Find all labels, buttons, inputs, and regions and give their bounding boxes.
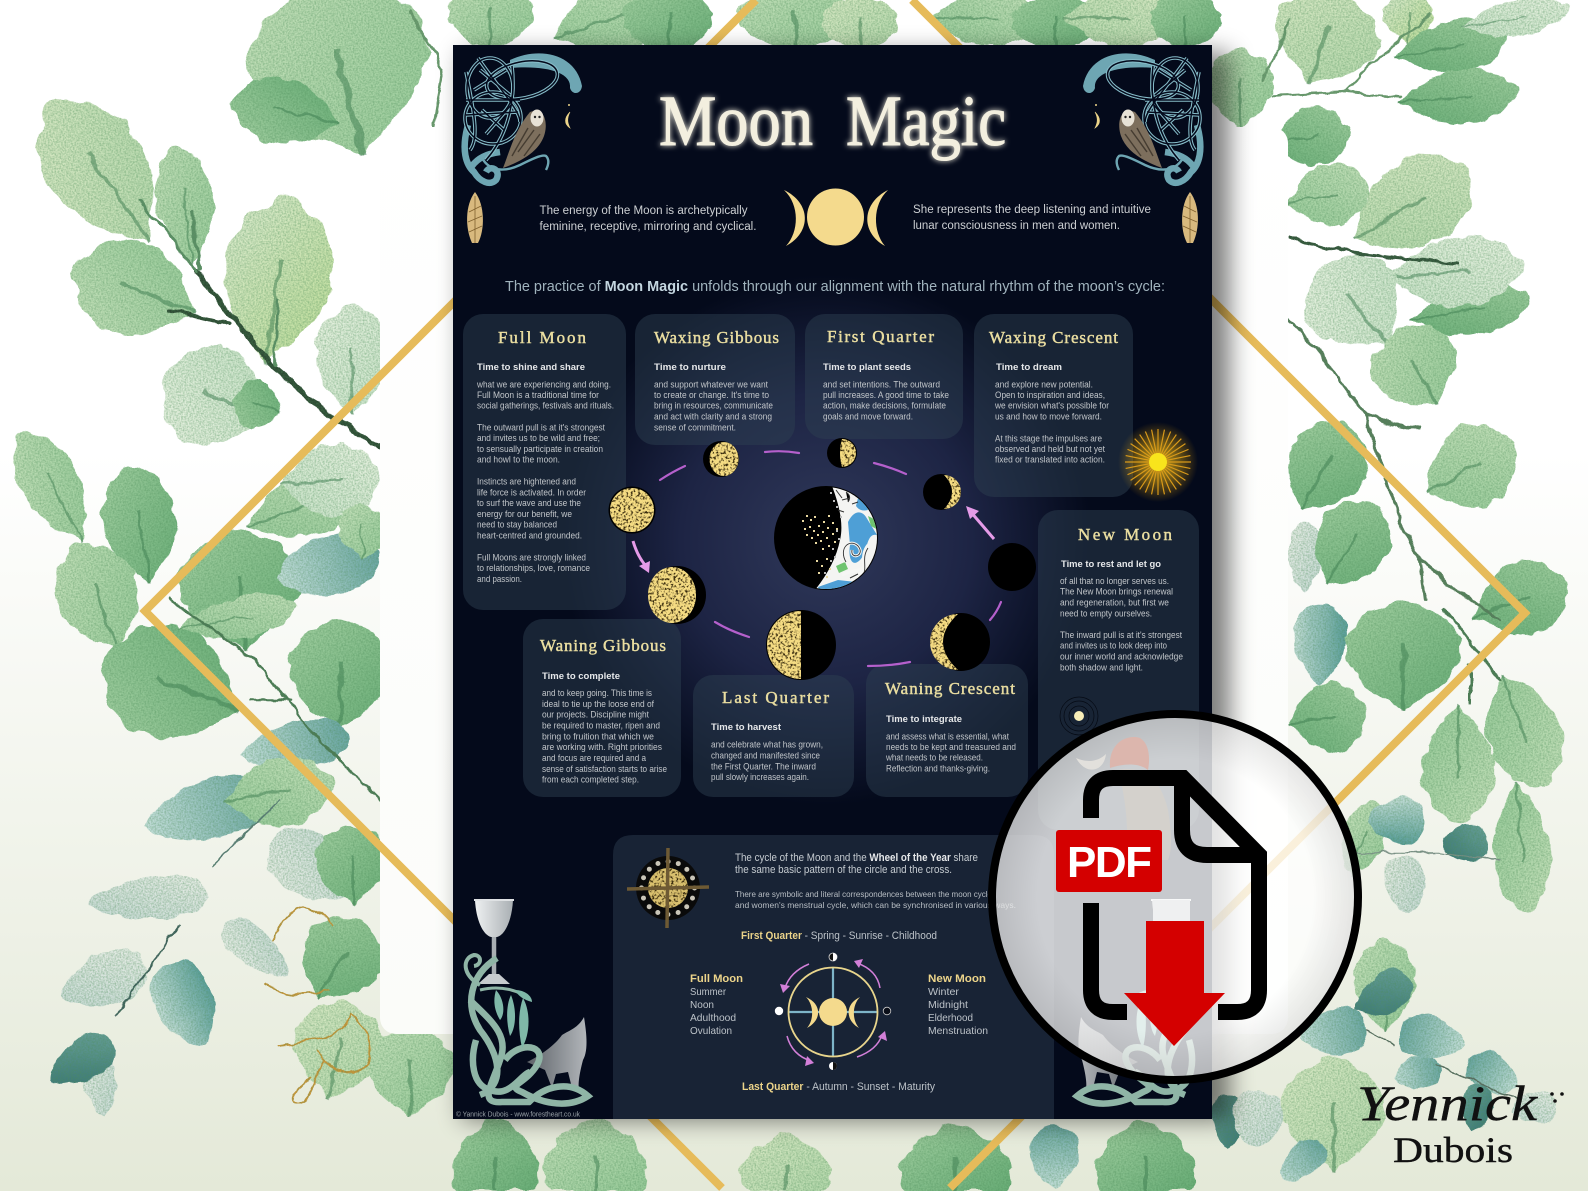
body text: Waning Crescent: and assess what is essential, what	[886, 731, 1009, 741]
body text: Full Moon: energy for our benefit, we	[477, 509, 572, 519]
body text: Full Moon: to sensually participate in creation	[477, 444, 603, 454]
body text: Full Moon: and invites us to be wild and free;	[477, 433, 600, 443]
body text: Waning Gibbous: sense of satisfaction starts to arise	[542, 764, 667, 774]
arrow: download	[1124, 921, 1225, 1046]
body text: New Moon: and invites us to look deep into	[1060, 641, 1167, 651]
body text: Waning Gibbous: bring to fruition that which we	[542, 731, 654, 741]
central glow	[560, 275, 1090, 805]
poster shadow	[462, 52, 1230, 1120]
body text: New Moon: need to empty ourselves.	[1060, 608, 1152, 618]
body text: First Quarter	[823, 379, 949, 422]
new moon correspondences: Elderhood	[928, 1012, 973, 1024]
new moon correspondences: Winter	[928, 986, 960, 998]
body text: Waxing Gibbous: to create or change. It's time to	[654, 390, 769, 400]
moon orbit arcs	[660, 451, 1001, 666]
body text: Waning Gibbous: our projects. Discipline might	[542, 710, 650, 720]
body text: Waxing Gibbous	[654, 379, 773, 432]
card headings: Full Moon	[498, 328, 586, 347]
card subheadings	[477, 362, 1161, 733]
signature	[1357, 1075, 1564, 1170]
body text: Waxing Gibbous: and support whatever we want	[654, 379, 769, 389]
intro text left	[540, 205, 756, 233]
body text: Waning Gibbous: and focus are required and a	[542, 753, 646, 763]
title	[659, 81, 1006, 161]
card subheadings: Time to plant seeds	[823, 362, 911, 373]
correspondences note: There are symbolic and literal correspondences between the moon cycle	[735, 889, 992, 899]
intro text left: The energy of the Moon is archetypically	[540, 205, 748, 217]
moon: waning gibbous	[648, 566, 706, 624]
white card behind poster	[380, 127, 1288, 1034]
body text: New Moon: The inward pull is at it's strongest	[1060, 630, 1183, 640]
card headings: First Quarter	[827, 327, 934, 346]
body text: Waning Crescent: what needs to be released.	[885, 753, 983, 763]
correspondences note	[735, 889, 1016, 910]
body text: Waning Gibbous	[542, 688, 667, 785]
pdf label: PDF	[1067, 838, 1152, 887]
full moon correspondences: Summer	[690, 986, 726, 998]
card headings: Waxing Crescent	[989, 328, 1118, 347]
body text: Waxing Crescent: we envision what's possible for	[994, 401, 1109, 411]
body text: Waxing Gibbous: bring in resources, communicate	[654, 401, 773, 411]
card subheadings: Time to nurture	[654, 362, 726, 373]
body text: Last Quarter: and celebrate what has grown,	[711, 740, 823, 750]
body text: First Quarter: goals and move forward.	[823, 412, 913, 422]
body text: New Moon: and regeneration, but first we	[1060, 597, 1169, 607]
title: Magic	[846, 81, 1006, 161]
card subheadings: Time to complete	[542, 671, 620, 682]
wheel text: The cycle of the Moon and the Wheel of the Year share	[735, 852, 978, 864]
card headings: Waning Gibbous	[540, 636, 666, 655]
body text: Full Moon: heart-centred and grounded.	[477, 531, 582, 541]
icon: triple moon	[784, 188, 888, 246]
body text: First Quarter: pull increases. A good time to take	[823, 390, 949, 400]
new moon correspondences	[928, 973, 988, 1037]
body text: Full Moon: and howl to the moon.	[477, 455, 560, 465]
faint figure behind lens	[1076, 737, 1190, 921]
full moon correspondences: Noon	[690, 999, 714, 1011]
intro text right: lunar consciousness in men and women.	[913, 220, 1120, 232]
card headings: Waxing Gibbous	[654, 328, 779, 347]
body text: First Quarter: and set intentions. The outward	[823, 379, 940, 389]
card subheadings: Time to shine and share	[477, 362, 585, 373]
body text: New Moon: both shadow and light.	[1060, 662, 1143, 672]
first quarter label: First Quarter - Spring - Sunrise - Childhood	[741, 930, 937, 942]
body text: Waning Gibbous: from each completed step.	[542, 775, 639, 785]
full moon correspondences	[690, 973, 743, 1037]
moon: full	[608, 486, 656, 534]
intro text right: She represents the deep listening and intuitive	[913, 204, 1151, 216]
card headings	[498, 327, 1172, 707]
full moon correspondences: Adulthood	[690, 1012, 736, 1024]
card headings: Waning Crescent	[885, 679, 1015, 698]
body text: Waning Gibbous: and to keep going. This time is	[542, 688, 653, 698]
panel: wheel of the year	[613, 835, 1054, 1119]
poster: Moon Magic	[453, 45, 1212, 1119]
copyright: © Yannick Dubois - www.forestheart.co.uk	[456, 1110, 580, 1118]
body text: Waning Gibbous: ideal to tie up the loose end of	[542, 699, 655, 709]
icon: sun	[1118, 422, 1198, 502]
body text: New Moon: The New Moon brings renewal	[1060, 587, 1173, 597]
body text: Waxing Crescent: observed and held but not yet	[995, 444, 1106, 454]
body text: Full Moon: Full Moon is a traditional time for	[477, 390, 599, 400]
card subheadings: Time to harvest	[711, 722, 782, 733]
icon: wheel of the year cross	[627, 848, 709, 928]
title: Moon	[659, 81, 813, 161]
card headings: New Moon	[1078, 525, 1172, 544]
moon cycle cards	[463, 314, 1199, 830]
last quarter label: Last Quarter - Autumn - Sunset - Maturity	[742, 1081, 935, 1093]
body text: Waning Crescent: Reflection and thanks-giving.	[886, 764, 990, 774]
body text: Full Moon: Full Moons are strongly linked	[477, 552, 586, 562]
body text: Last Quarter	[711, 740, 823, 782]
body text: Last Quarter: pull slowly increases again.	[711, 772, 809, 782]
body text: New Moon	[1060, 576, 1183, 672]
body text: Waxing Crescent	[994, 379, 1109, 465]
signature: Yennick	[1357, 1075, 1538, 1131]
body text: Full Moon	[476, 379, 614, 584]
body text: Waxing Crescent: At this stage the impulses are	[995, 433, 1102, 443]
body text: New Moon: of all that no longer serves us.	[1060, 576, 1169, 586]
correspondences note: and women's menstrual cycle, which can be synchronised in various ways.	[735, 900, 1016, 910]
card subheadings: Time to integrate	[886, 714, 962, 725]
card headings: Last Quarter	[722, 688, 829, 707]
body text: Full Moon: need to stay balanced	[477, 520, 557, 530]
corner knot and owl: top right	[1083, 53, 1200, 243]
body text: Waning Gibbous: are working with. Right priorities	[542, 742, 663, 752]
body text: Waning Crescent: needs to be kept and treasured and	[886, 742, 1016, 752]
body text: Waxing Crescent: fixed or translated into action.	[995, 455, 1105, 465]
body text: Full Moon: social gatherings, festivals and rituals.	[477, 401, 614, 411]
body text: First Quarter: action, make decisions, formulate	[823, 401, 946, 411]
wheel text	[735, 852, 978, 876]
arrow: orbit left	[633, 541, 650, 573]
body text: New Moon: our inner world and acknowledge	[1060, 652, 1183, 662]
intro text left: feminine, receptive, mirroring and cyclical.	[540, 221, 756, 233]
new moon correspondences: New Moon	[928, 973, 986, 985]
full moon correspondences: Ovulation	[690, 1025, 732, 1037]
body text: Full Moon: Instincts are hightened and	[477, 476, 576, 486]
card subheadings: Time to dream	[996, 362, 1062, 373]
full moon correspondences: Full Moon	[690, 973, 743, 985]
wheel text: the same basic pattern of the circle and the cross.	[735, 864, 952, 876]
body text: Full Moon: to relationships, love, romance	[477, 563, 590, 573]
corner knot and owl: top left	[465, 53, 582, 243]
body text: Full Moon: and passion.	[477, 574, 522, 584]
body text: Full Moon: life force is activated. In order	[477, 487, 586, 497]
pdf label	[1056, 830, 1162, 892]
body text: Waxing Crescent: Open to inspiration and ideas,	[995, 390, 1105, 400]
pdf download badge	[992, 714, 1358, 1080]
new moon correspondences: Midnight	[928, 999, 968, 1011]
wheel diagram	[775, 953, 891, 1070]
chalice, vine and wolf: bottom right	[1077, 899, 1199, 1104]
intro text right	[913, 204, 1151, 232]
body text: Waxing Gibbous: sense of commitment.	[654, 422, 736, 432]
moon: first quarter	[827, 438, 857, 468]
body text: Last Quarter: changed and manifested since	[711, 750, 820, 760]
icon: pdf document	[1091, 778, 1259, 1012]
body text: Waxing Crescent: us and how to move forward.	[995, 411, 1102, 421]
chalice, vine and wolf: bottom left	[466, 899, 588, 1104]
moon: waxing gibbous	[703, 441, 739, 477]
body text: Full Moon: The outward pull is at it's strongest	[477, 422, 606, 432]
body text: Full Moon: to surf the wave and use the	[477, 498, 581, 508]
body text: Waxing Crescent: and explore new potential.	[995, 379, 1093, 389]
body text: Last Quarter: the First Quarter. The inward	[711, 761, 816, 771]
body text: Full Moon: what we are experiencing and doing.	[476, 379, 611, 389]
body text: Waning Crescent	[885, 731, 1016, 774]
new moon correspondences: Menstruation	[928, 1025, 988, 1037]
practice statement: The practice of Moon Magic unfolds through our alignment with the natural rhythm of the moon’s cycle:	[505, 279, 1165, 295]
arrow: orbit upper right	[966, 506, 994, 539]
moon: new	[988, 543, 1036, 591]
earth	[774, 486, 880, 592]
body text: Waning Gibbous: be required to master, ripen and	[542, 721, 660, 731]
body text: Waxing Gibbous: and act with clarity and a strong	[654, 412, 772, 422]
icon: new moon rings	[1060, 697, 1098, 735]
card subheadings: Time to rest and let go	[1061, 559, 1161, 570]
moon: waning crescent	[930, 613, 990, 671]
moon: last quarter	[766, 610, 836, 680]
moon: waxing crescent	[923, 474, 961, 510]
signature: Dubois	[1393, 1130, 1513, 1170]
